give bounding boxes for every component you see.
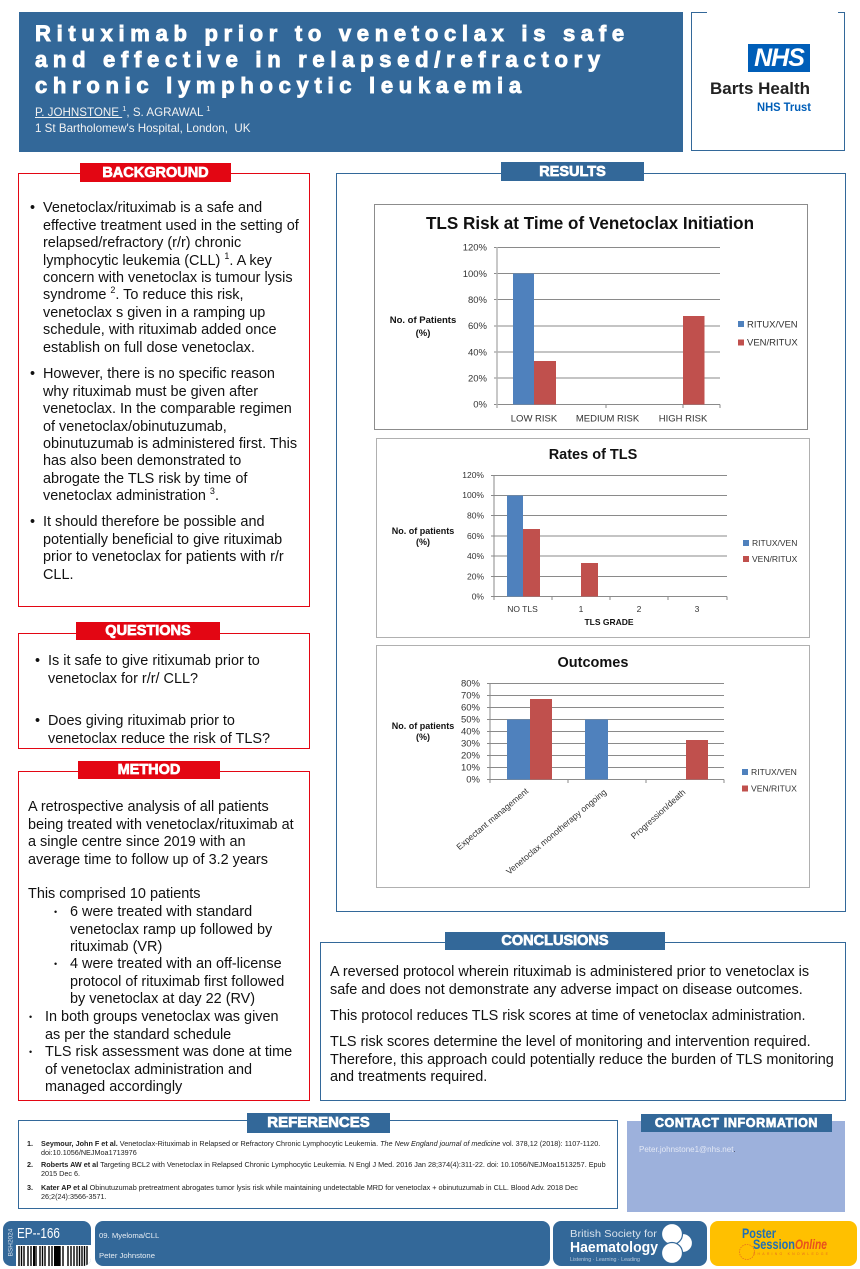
chart: outcomes: Expectant management <box>454 785 531 852</box>
bullet text: venetoclax context <box>30 200 299 356</box>
question 2: venetoclax reduce the risk of TLS? <box>48 731 270 747</box>
bullet text: venetoclax context: venetoclax s given in a ramping up <box>43 305 265 321</box>
schedule note: as per the standard schedule <box>45 1027 231 1043</box>
poster number: EP--166 <box>17 1225 60 1242</box>
reference 2 <box>27 1160 606 1178</box>
logo box: Barts Health NHS Trust <box>691 12 845 151</box>
chart: outcomes: No. of patients <box>392 721 454 731</box>
chart: rates of TLS: 0% <box>472 592 484 602</box>
bullet text: venetoclax context: establish on full dose venetoclax. <box>43 340 255 356</box>
panel: conclusions <box>320 942 846 1101</box>
bullet text: no specific reason: obinutuzumab is administered first. This <box>43 436 297 452</box>
title: Rituximab prior to venetoclax is safe <box>35 21 630 46</box>
chart: outcomes: 10% <box>461 762 481 774</box>
footer tile: Poster Session Online logo: Online <box>795 1236 827 1252</box>
heading: contact information: CONTACT INFORMATION <box>655 1116 818 1130</box>
panel: references: 2. <box>27 1160 33 1169</box>
contact email: Peter.johnstone1@nhs.net. <box>639 1145 736 1154</box>
panel: background <box>18 173 310 607</box>
bullet text: venetoclax context: syndrome 2. To reduce this risk, <box>43 286 244 303</box>
conclusion 3: and treatments required. <box>330 1069 487 1085</box>
bullet text: venetoclax context: concern with venetoclax is tumour lysis <box>43 270 293 286</box>
footer tile: Poster Session Online logo: Session <box>753 1236 795 1252</box>
header banner <box>19 12 683 152</box>
chart: rates of TLS: 60% <box>467 531 484 541</box>
heading: questions <box>76 622 220 640</box>
footer tile: Poster Session Online logo: SHARING KNOWLEDGE <box>753 1252 829 1256</box>
authors <box>35 104 251 135</box>
cohort RV: protocol of rituximab first followed <box>70 974 284 990</box>
footer tile: British Society for Haematology logo: British Society for <box>570 1228 658 1240</box>
bullet text: no specific reason: abrogate the TLS risk by time of <box>43 471 247 487</box>
TLS assessment note <box>29 1044 292 1095</box>
chart: rates of TLS: (%) <box>416 537 430 547</box>
chart: rates of TLS: Rates of TLS <box>549 447 638 463</box>
category: 09. Myeloma/CLL <box>99 1231 159 1240</box>
bullet text: rationale: It should therefore be possible and <box>43 514 265 530</box>
bullet text: venetoclax context: lymphocytic leukemia (CLL) 1. A key <box>43 251 272 269</box>
organisation name: Barts Health <box>710 79 810 98</box>
panel: background: • <box>30 200 35 216</box>
chart: TLS risk at time of venetoclax initiation: 60% <box>468 321 488 332</box>
footer tile: Poster Session Online logo <box>710 1221 857 1266</box>
heading: results: RESULTS <box>539 164 606 180</box>
reference 2: Roberts AW et al Targeting BCL2 with Venetoclax in Relapsed Chronic Lymphocytic Leukemia. N Engl J Med. 2016 Jan 28;374(4):311-22. doi: 10.1056/NEJMoa1513257. Epub <box>41 1160 606 1169</box>
panel: method: • <box>29 1012 32 1022</box>
chart: TLS risk at time of venetoclax initiation: RITUX/VEN <box>747 320 798 330</box>
chart: outcomes: Venetoclax monotherapy ongoing <box>504 787 608 877</box>
heading: results <box>501 162 644 181</box>
chart: TLS risk at time of venetoclax initiation: VEN/RITUX <box>747 338 798 348</box>
chart: outcomes: 20% <box>461 750 481 762</box>
heading: references: REFERENCES <box>267 1114 370 1131</box>
chart: rates of TLS: No. of patients <box>392 526 454 536</box>
chart: TLS risk at time of venetoclax initiation: (%) <box>416 328 430 339</box>
chart: TLS risk at time of venetoclax initiation: 80% <box>468 295 488 306</box>
cohort RV <box>54 956 284 1007</box>
bullet text: venetoclax context: Venetoclax/rituximab is a safe and <box>43 200 262 216</box>
panel: background: • <box>30 514 35 530</box>
heading: references <box>247 1113 390 1133</box>
chart: outcomes <box>376 645 810 888</box>
footer tile: British Society for Haematology logo: Haematology <box>570 1240 658 1256</box>
panel: questions <box>18 633 310 749</box>
cohort VR: 6 were treated with standard <box>70 904 252 920</box>
icon: barcode <box>16 1245 91 1266</box>
bullet text: venetoclax context: relapsed/refractory (r/r) chronic <box>43 235 241 251</box>
chart: TLS risk at time of venetoclax initiation: TLS Risk at Time of Venetoclax Initiation <box>426 213 754 233</box>
chart: outcomes: 30% <box>461 738 481 750</box>
chart: rates of TLS: TLS GRADE <box>584 617 634 627</box>
question 2 <box>35 713 270 747</box>
panel: method: • <box>54 907 57 917</box>
authors: P. JOHNSTONE 1, S. AGRAWAL 1 <box>35 104 210 118</box>
cohort RV: by venetoclax at day 22 (RV) <box>70 991 255 1007</box>
reference 3 <box>27 1183 578 1201</box>
cohort RV: 4 were treated with an off-license <box>70 956 282 972</box>
bullet text: rationale: potentially beneficial to give rituximab <box>43 532 282 548</box>
chart: outcomes: Progression/death <box>629 787 688 841</box>
bullet text: rationale: prior to venetoclax for patients with r/r <box>43 549 284 565</box>
TLS assessment note: managed accordingly <box>45 1079 182 1095</box>
reference 3: 26;2(24):3566-3571. <box>41 1192 107 1201</box>
bullet text: venetoclax context: schedule, with rituximab added once <box>43 322 277 338</box>
reference 3: Kater AP et al Obinutuzumab pretreatment abrogates tumor lysis risk while maintaining undetectable MRD for venetoclax + obinutuzumab in CLL. Blood Adv. 2018 Dec <box>41 1183 578 1192</box>
chart: TLS risk at time of venetoclax initiation: HIGH RISK <box>659 414 708 424</box>
authors: 1 St Bartholomew's Hospital, London, UK <box>35 122 251 135</box>
footer tile: Poster Session Online logo: Poster <box>742 1225 776 1241</box>
conclusion 3 <box>330 1034 834 1085</box>
cohort VR: venetoclax ramp up followed by <box>70 922 272 938</box>
panel: contact information <box>627 1121 845 1212</box>
chart: rates of TLS: 120% <box>462 470 484 480</box>
reference 1: Seymour, John F et al. Venetoclax-Rituximab in Relapsed or Refractory Chronic Lymphocytic Leukemia. The New England journal of medicine vol. 378,12 (2018): 1107-1120. <box>41 1139 600 1148</box>
chart: outcomes: 40% <box>461 726 481 738</box>
title: chronic lymphocytic leukaemia <box>35 73 527 98</box>
heading: method: METHOD <box>118 762 180 778</box>
reference 2: 2015 Dec 6. <box>41 1169 80 1178</box>
panel: questions: • <box>35 653 40 669</box>
heading: method <box>78 761 220 779</box>
chart: rates of TLS: 3 <box>695 604 700 614</box>
method summary: average time to follow up of 3.2 years <box>28 852 268 868</box>
TLS assessment note: of venetoclax administration and <box>45 1062 252 1078</box>
chart: TLS risk at time of venetoclax initiation: 40% <box>468 348 488 358</box>
schedule note: In both groups venetoclax was given <box>45 1009 279 1025</box>
chart: rates of TLS: 2 <box>637 604 642 614</box>
conclusion 1 <box>330 964 809 998</box>
chart: outcomes: 70% <box>461 690 481 702</box>
chart: rates of TLS: NO TLS <box>507 604 538 614</box>
author: Peter Johnstone <box>99 1251 155 1260</box>
chart: rates of TLS: VEN/RITUX <box>752 554 798 564</box>
panel: method: • <box>29 1047 32 1057</box>
question 1 <box>35 653 260 687</box>
question 2: Does giving rituximab prior to <box>48 713 235 729</box>
bullet text: no specific reason: has also been demonstrated to <box>43 453 241 469</box>
chart: outcomes: 80% <box>461 678 481 690</box>
panel: method: • <box>54 959 57 969</box>
chart: outcomes: 60% <box>461 702 481 714</box>
chart: TLS risk at time of venetoclax initiation: 100% <box>463 269 488 280</box>
bullet text: no specific reason: venetoclax. In the comparable regimen <box>43 401 292 417</box>
chart: outcomes: 0% <box>466 774 481 786</box>
bullet text: no specific reason <box>30 366 297 504</box>
heading: background <box>80 163 231 182</box>
chart: outcomes: Outcomes <box>558 655 628 671</box>
method summary: being treated with venetoclax/rituximab at <box>28 817 294 833</box>
conclusion 3: Therefore, this approach could potentially reduce the burden of TLS monitoring <box>330 1052 834 1068</box>
chart: outcomes: (%) <box>416 732 430 742</box>
chart: outcomes: 50% <box>461 714 481 726</box>
footer tile: category and author <box>95 1221 550 1266</box>
chart: outcomes: RITUX/VEN <box>751 767 797 777</box>
chart: rates of TLS: 40% <box>467 551 484 561</box>
title: and effective in relapsed/refractory <box>35 47 606 72</box>
TLS assessment note: TLS risk assessment was done at time <box>45 1044 292 1060</box>
reference 1 <box>27 1139 600 1157</box>
panel: references: 1. <box>27 1139 33 1148</box>
chart: rates of TLS <box>376 438 810 638</box>
cohort VR: rituximab (VR) <box>70 939 162 955</box>
panel: background: • <box>30 366 35 382</box>
panel: method <box>18 771 310 1101</box>
heading: background: BACKGROUND <box>102 165 209 181</box>
chart: outcomes: VEN/RITUX <box>751 784 797 794</box>
reference 1: doi:10.1056/NEJMoa1713976 <box>41 1148 137 1157</box>
icon: NHS logo: NHS <box>754 44 804 72</box>
heading: conclusions: CONCLUSIONS <box>501 933 609 949</box>
rotated session code: BSH2024 <box>8 1229 14 1256</box>
footer tile: poster id and barcode <box>3 1221 91 1266</box>
chart: TLS risk at time of venetoclax initiation: No. of Patients <box>390 315 456 326</box>
organisation name: NHS Trust <box>757 100 811 114</box>
chart: TLS risk at time of venetoclax initiation <box>374 204 808 430</box>
conclusion 1: safe and does not demonstrate any adverse impact on disease outcomes. <box>330 982 803 998</box>
bullet text: no specific reason: why rituximab must be given after <box>43 384 258 400</box>
chart: TLS risk at time of venetoclax initiation: MEDIUM RISK <box>576 414 640 424</box>
panel: results <box>336 173 846 912</box>
method summary: A retrospective analysis of all patients <box>28 799 269 815</box>
heading: questions: QUESTIONS <box>105 623 191 639</box>
conclusion 2: This protocol reduces TLS risk scores at time of venetoclax administration. <box>330 1008 806 1024</box>
bullet text: no specific reason: However, there is no specific reason <box>43 366 275 382</box>
bullet text: no specific reason: venetoclax administration 3. <box>43 486 219 504</box>
method summary: a single centre since 2019 with an <box>28 834 246 850</box>
bullet text: rationale: CLL. <box>43 567 74 583</box>
title <box>35 21 630 98</box>
footer tile: British Society for Haematology logo <box>553 1221 707 1266</box>
cohort intro: This comprised 10 patients <box>28 886 201 902</box>
question 1: Is it safe to give ritixumab prior to <box>48 653 260 669</box>
chart: TLS risk at time of venetoclax initiation: LOW RISK <box>511 414 558 424</box>
conclusion 3: TLS risk scores determine the level of monitoring and intervention required. <box>330 1034 811 1050</box>
heading: conclusions <box>445 932 665 950</box>
panel: references <box>18 1120 618 1209</box>
chart: TLS risk at time of venetoclax initiation: 0% <box>473 400 488 410</box>
chart: rates of TLS: 20% <box>467 572 484 582</box>
chart: rates of TLS: RITUX/VEN <box>752 538 797 548</box>
panel: questions: • <box>35 713 40 729</box>
cohort VR <box>54 904 272 955</box>
chart: TLS risk at time of venetoclax initiation: 20% <box>468 374 488 384</box>
chart: rates of TLS: 100% <box>462 490 484 500</box>
panel: references: 3. <box>27 1183 33 1192</box>
bullet text: rationale <box>30 514 284 583</box>
question 1: venetoclax for r/r/ CLL? <box>48 671 198 687</box>
footer tile: British Society for Haematology logo: Listening · Learning · Leading <box>570 1257 640 1263</box>
chart: TLS risk at time of venetoclax initiation: 120% <box>463 242 488 254</box>
bullet text: venetoclax context: effective treatment used in the setting of <box>43 218 299 234</box>
method summary <box>28 799 294 868</box>
bullet text: no specific reason: of venetoclax/obinutuzumab, <box>43 419 227 435</box>
heading: contact information <box>641 1114 832 1132</box>
conclusion 1: A reversed protocol wherein rituximab is administered prior to venetoclax is <box>330 964 809 980</box>
organisation name <box>710 79 811 114</box>
chart: rates of TLS: 1 <box>579 604 584 614</box>
chart: rates of TLS: 80% <box>467 510 484 520</box>
schedule note <box>29 1009 279 1043</box>
